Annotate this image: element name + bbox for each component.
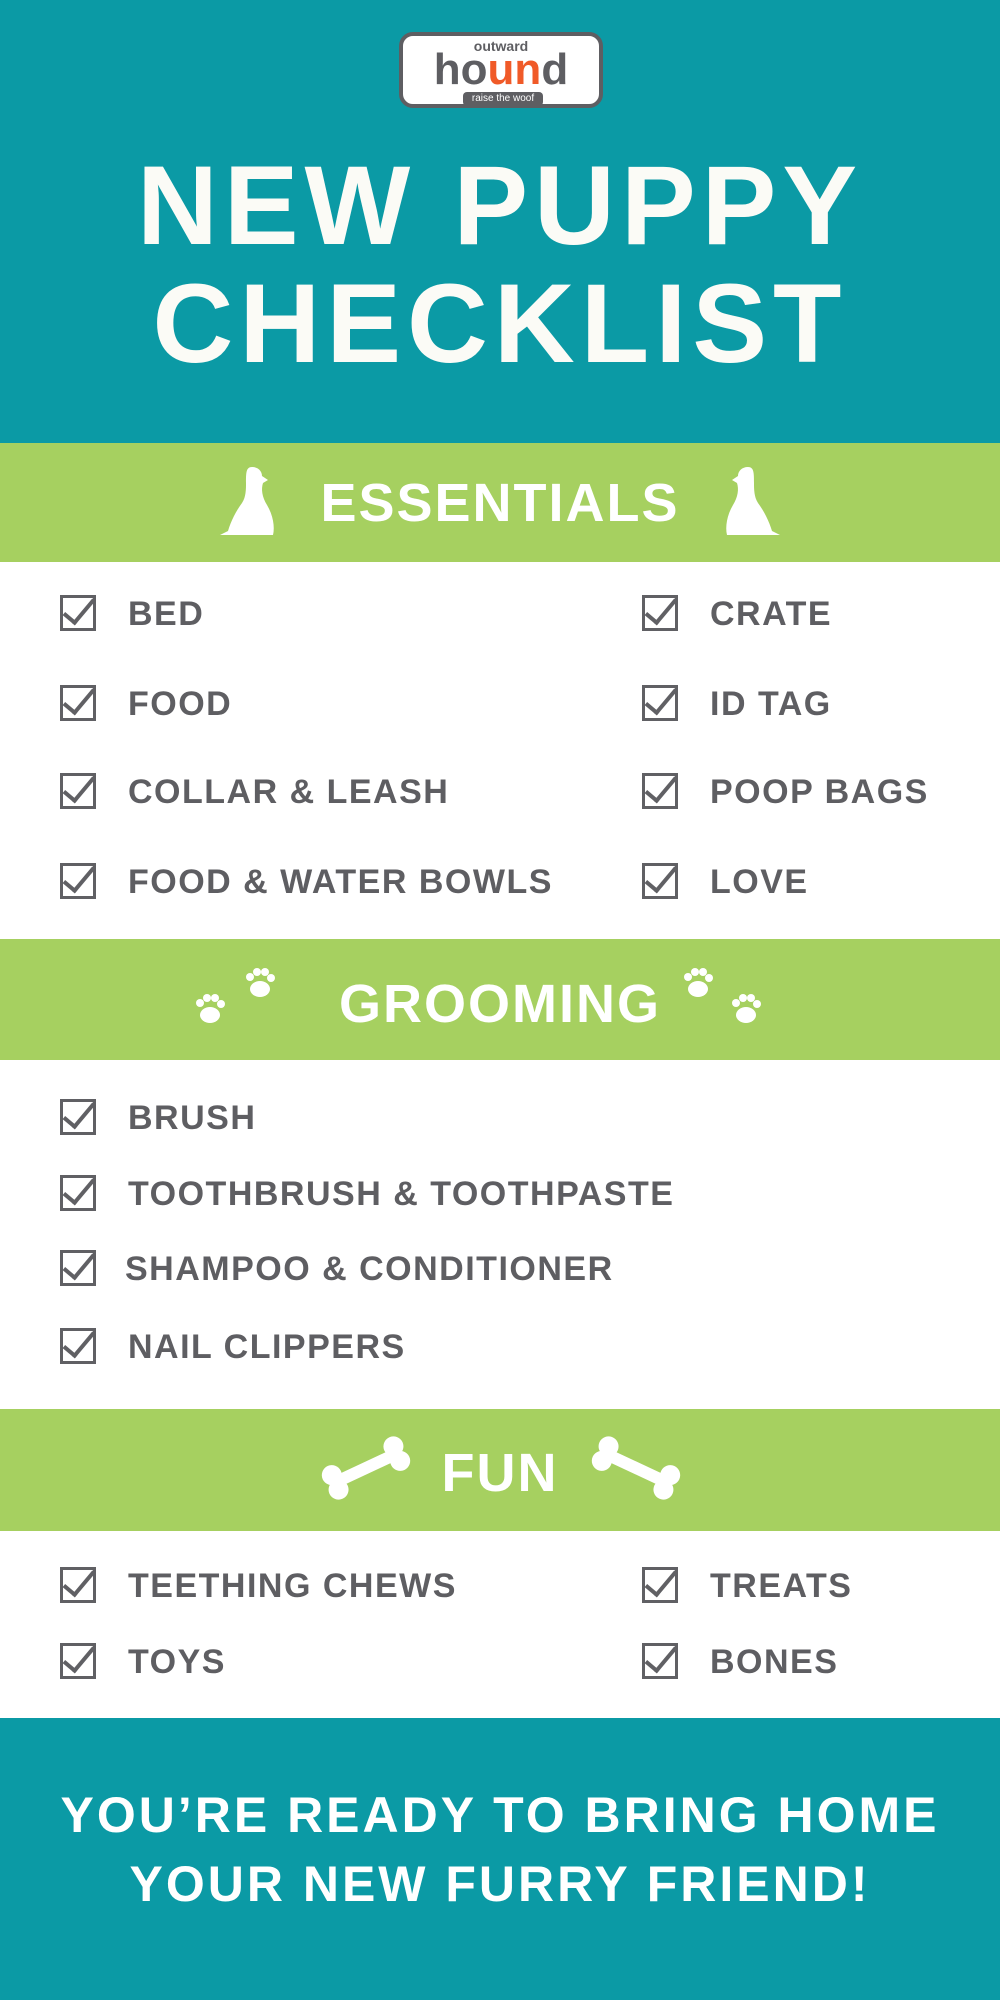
list: grooming: TOOTHBRUSH & TOOTHPASTE: [128, 1175, 674, 1213]
list: grooming: BRUSH: [128, 1099, 256, 1137]
list: essentials: POOP BAGS: [710, 773, 929, 811]
footer: [0, 1718, 1000, 2000]
list: essentials: COLLAR & LEASH: [128, 773, 449, 811]
list: essentials: LOVE: [710, 863, 809, 901]
list: fun: TOYS: [128, 1643, 226, 1681]
title: [137, 143, 863, 386]
icon: paws right: [684, 968, 761, 1023]
list: fun: [60, 1567, 852, 1681]
list: essentials: FOOD & WATER BOWLS: [128, 863, 553, 901]
header background: [0, 0, 1000, 443]
list: essentials: CRATE: [710, 595, 832, 633]
icon: dog left: [220, 467, 274, 535]
logo: hound: [434, 45, 568, 94]
list: fun: TREATS: [710, 1567, 852, 1605]
footer: YOU’RE READY TO BRING HOME: [60, 1787, 940, 1843]
icon: bone right: [592, 1436, 680, 1500]
list: fun: TEETHING CHEWS: [128, 1567, 457, 1605]
icon: paws left: [196, 968, 275, 1023]
band: grooming: GROOMING: [339, 974, 661, 1034]
footer: YOUR NEW FURRY FRIEND!: [130, 1856, 870, 1912]
list: fun: BONES: [710, 1643, 838, 1681]
band: essentials: [0, 443, 1000, 562]
icon: dog right: [726, 467, 780, 535]
list: grooming: SHAMPOO & CONDITIONER: [125, 1250, 614, 1288]
list: essentials: ID TAG: [710, 685, 832, 723]
list: grooming: NAIL CLIPPERS: [128, 1328, 406, 1366]
icon: bone left: [322, 1436, 410, 1500]
band: fun: FUN: [442, 1443, 558, 1503]
band: fun: [0, 1409, 1000, 1531]
list: grooming: [60, 1099, 674, 1366]
list: essentials: FOOD: [128, 685, 232, 723]
logo: outward: [474, 38, 528, 54]
title: NEW PUPPY: [137, 143, 863, 268]
logo: raise the woof: [472, 93, 534, 104]
title: CHECKLIST: [153, 261, 847, 386]
list: essentials: BED: [128, 595, 204, 633]
list: essentials: [60, 595, 929, 901]
logo: [399, 32, 603, 108]
band: essentials: ESSENTIALS: [320, 473, 680, 533]
band: grooming: [0, 939, 1000, 1060]
